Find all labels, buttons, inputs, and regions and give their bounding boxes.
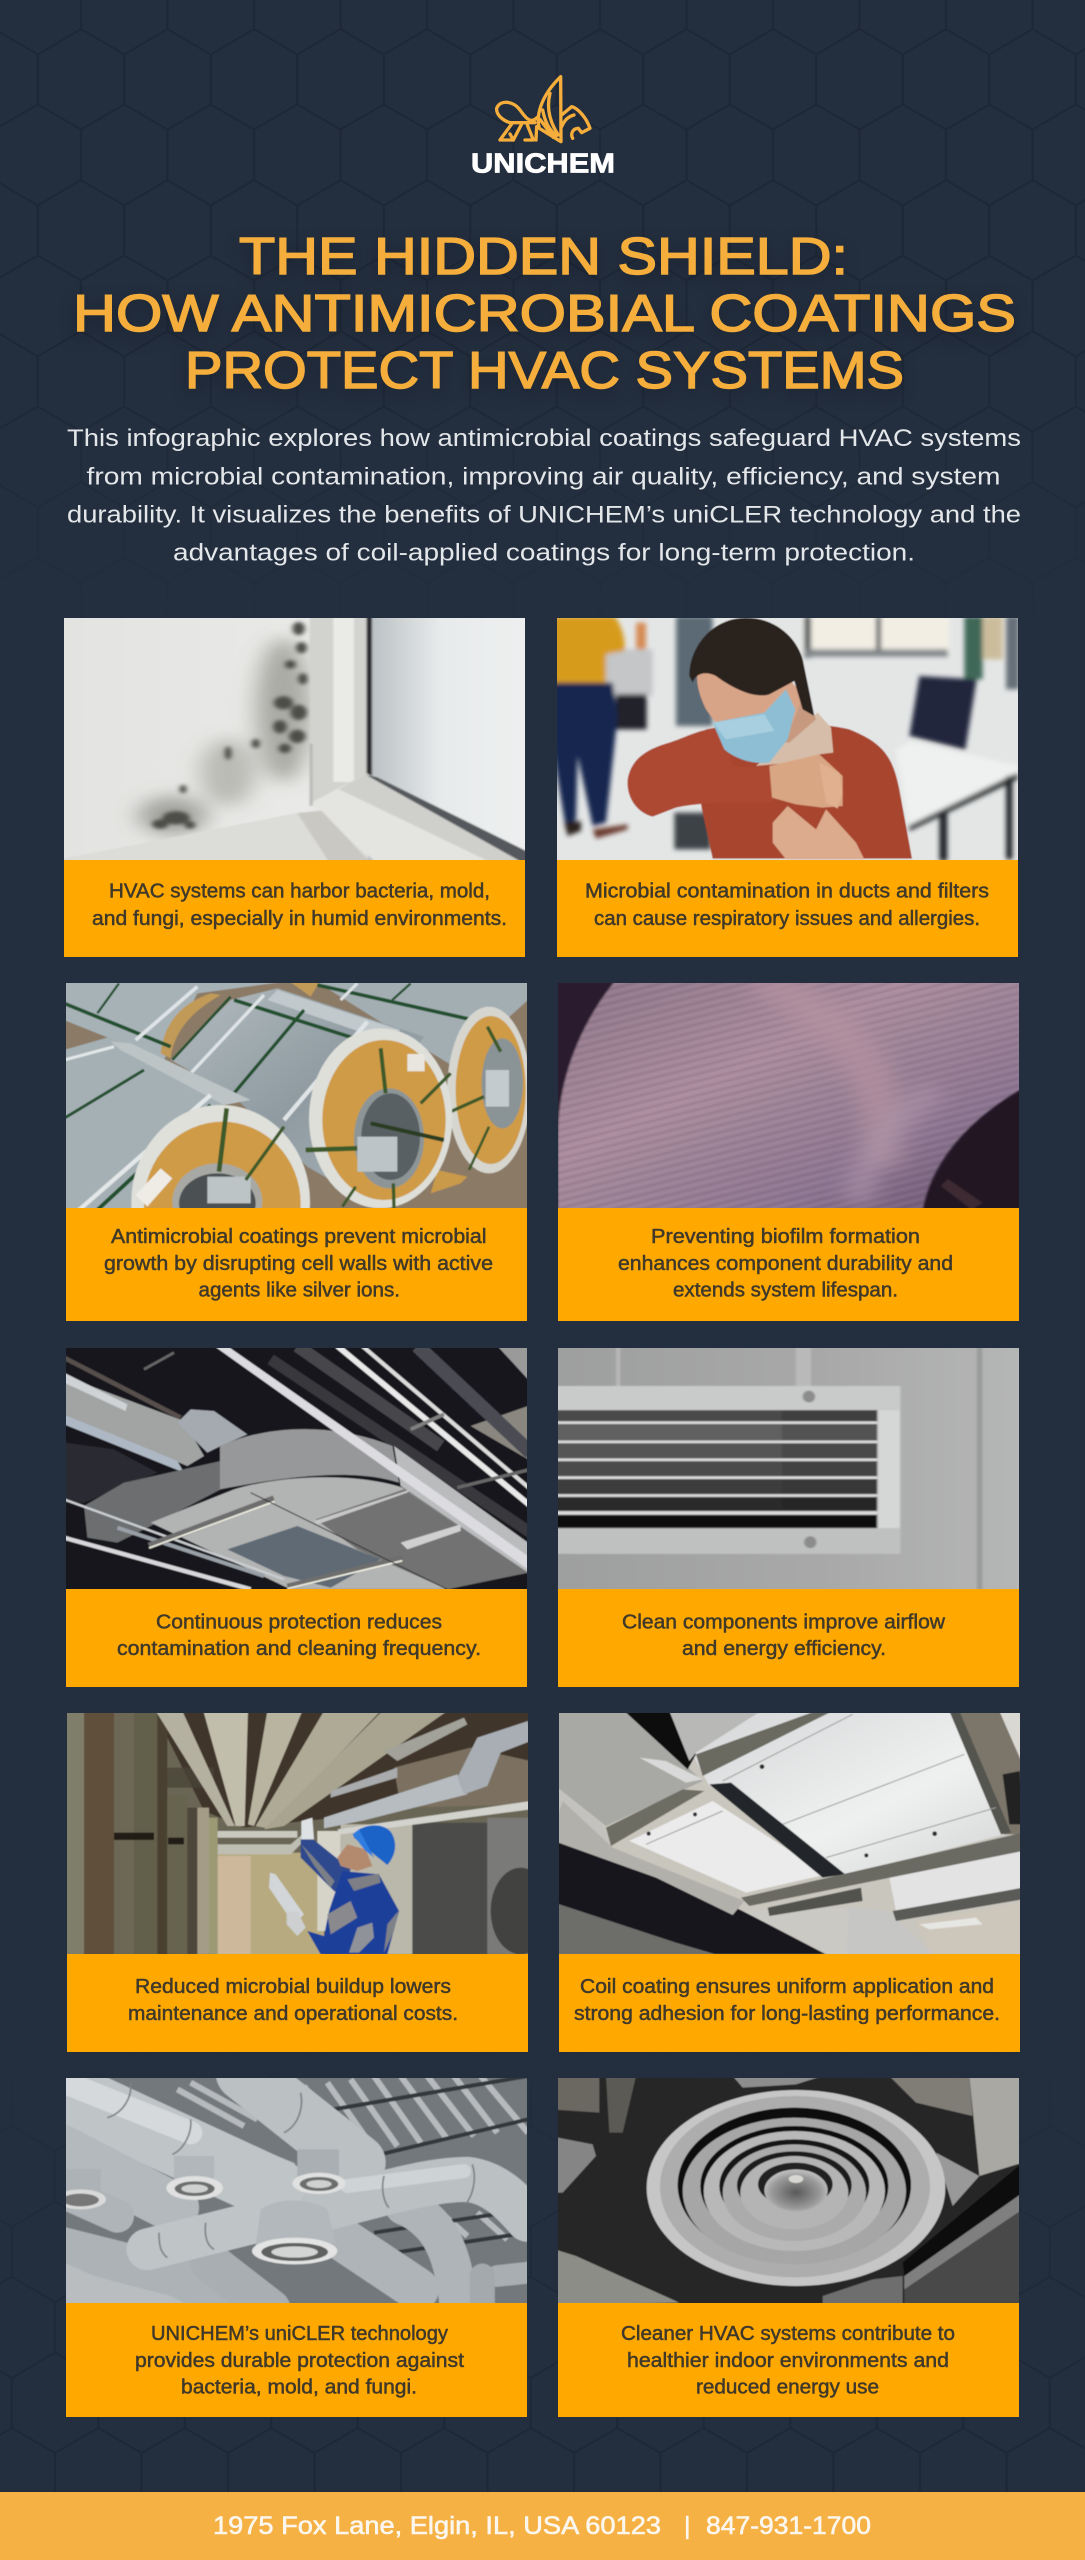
caption: Clean components improve airflow: [622, 1612, 946, 1634]
right coil: [447, 1007, 531, 1173]
caption: Continuous protection reduces: [156, 1612, 442, 1634]
caption: strong adhesion for long-lasting performance.: [574, 2003, 1000, 2025]
caption: Reduced microbial buildup lowers: [135, 1976, 451, 1998]
logo: UNICHEM griffin mark and wordmark: [471, 77, 615, 178]
photo: painted round ducts: [66, 2078, 527, 2303]
caption: [67, 1954, 528, 2052]
caption: [557, 860, 1018, 957]
caption: can cause respiratory issues and allergies.: [594, 908, 980, 930]
caption: and fungi, especially in humid environments.: [92, 908, 507, 930]
panel: continuous protection: [47, 1329, 547, 1687]
panel: uniCLER technology: [47, 2059, 547, 2417]
intro text: from microbial contamination, improving air quality, efficiency, and system: [86, 464, 1000, 490]
photo: coughing woman in mask: [557, 618, 1018, 860]
title: THE HIDDEN SHIELD:: [239, 228, 848, 286]
icon: griffin: [497, 77, 590, 142]
photo: round ceiling diffuser: [558, 2078, 1019, 2303]
panel: coatings prevent growth: [47, 963, 547, 1321]
caption: [558, 1589, 1019, 1687]
caption: and energy efficiency.: [682, 1638, 886, 1660]
wordmark: UNICHEM: [471, 148, 615, 178]
photo: steel coils: [66, 983, 527, 1208]
title: HOW ANTIMICROBIAL COATINGS: [73, 285, 1016, 343]
intro text: [67, 425, 1021, 566]
panel: harbor bacteria: [41, 600, 576, 957]
footer bar: [0, 2492, 1085, 2560]
caption: Preventing biofilm formation: [651, 1226, 920, 1248]
photo: silver duct panels: [559, 1713, 1020, 1954]
caption: UNICHEM’s uniCLER technology: [151, 2323, 448, 2345]
caption: [66, 2303, 527, 2417]
middle coil: [171, 988, 424, 1180]
caption: provides durable protection against: [135, 2350, 464, 2372]
panel: lower maintenance: [47, 1694, 551, 2052]
caption: enhances component durability and: [618, 1253, 953, 1275]
panel: airflow and efficiency: [540, 1335, 1038, 1687]
caption: contamination and cleaning frequency.: [117, 1638, 481, 1660]
caption: reduced energy use: [696, 2376, 879, 2398]
photo: technician inspecting pipes: [67, 1713, 528, 1954]
caption: [558, 1208, 1019, 1321]
panel: respiratory issues: [539, 599, 1039, 957]
title: [73, 228, 1016, 400]
caption: maintenance and operational costs.: [128, 2003, 458, 2025]
front coil: [64, 1037, 224, 1210]
caption: bacteria, mold, and fungi.: [181, 2376, 417, 2398]
intro text: advantages of coil-applied coatings for long-term protection.: [173, 540, 915, 566]
caption: extends system lifespan.: [673, 1280, 898, 1302]
footer bar: |: [684, 2512, 690, 2540]
caption: [558, 2303, 1019, 2417]
caption: [559, 1954, 1020, 2052]
photo: mold by window: [64, 618, 525, 860]
worker: [301, 1839, 351, 1894]
photo: wall air vent: [558, 1348, 1019, 1589]
intro text: durability. It visualizes the benefits of UNICHEM’s uniCLER technology and the: [67, 502, 1021, 528]
left wall boards: [57, 1711, 84, 1958]
footer bar: 1975 Fox Lane, Elgin, IL, USA 60123: [213, 2512, 661, 2540]
caption: Coil coating ensures uniform application and: [580, 1976, 994, 1998]
caption: healthier indoor environments and: [627, 2350, 949, 2372]
caption: HVAC systems can harbor bacteria, mold,: [109, 880, 490, 902]
pipes: [156, 1711, 235, 1826]
woman: [699, 723, 912, 859]
caption: [66, 1208, 527, 1321]
panel: healthier environments: [539, 2059, 1039, 2417]
caption: [64, 860, 525, 957]
title: PROTECT HVAC SYSTEMS: [185, 342, 904, 400]
panel: biofilm prevention: [540, 973, 1038, 1321]
back coils: [64, 980, 297, 1060]
footer bar: 847-931-1700: [706, 2512, 871, 2540]
caption: Cleaner HVAC systems contribute to: [621, 2323, 955, 2345]
caption: agents like silver ions.: [198, 1280, 400, 1302]
photo: coated metal coil: [558, 983, 1019, 1208]
caption: [66, 1589, 527, 1687]
caption: growth by disrupting cell walls with active: [104, 1253, 493, 1275]
intro text: This infographic explores how antimicrobial coatings safeguard HVAC systems: [67, 425, 1021, 452]
panel: coil coating adhesion: [539, 1694, 1039, 2052]
photo: galvanized ductwork: [66, 1348, 527, 1589]
caption: Microbial contamination in ducts and filters: [585, 880, 989, 902]
caption: Antimicrobial coatings prevent microbial: [111, 1226, 486, 1248]
